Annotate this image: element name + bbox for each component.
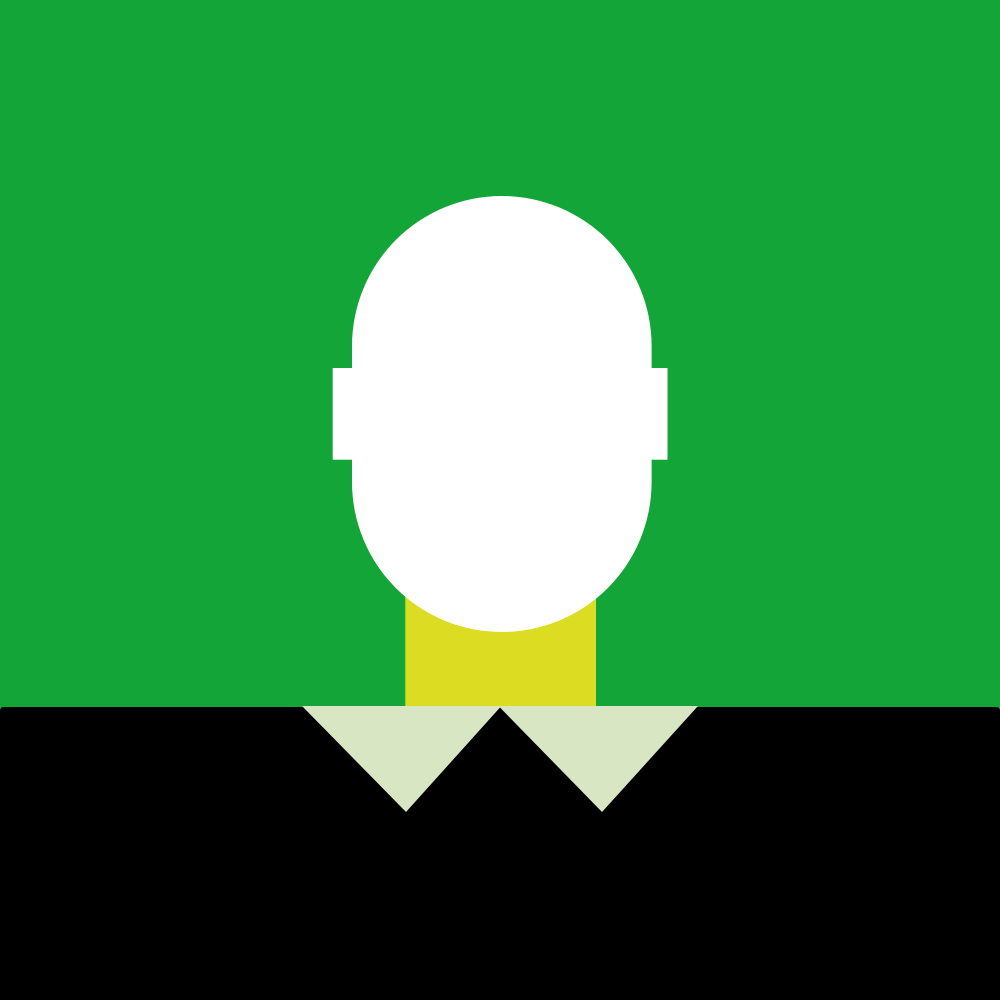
collar xyxy=(302,706,698,812)
neck xyxy=(405,560,596,710)
head shape xyxy=(352,196,652,632)
head xyxy=(333,196,668,632)
shirt body xyxy=(0,707,1000,1000)
ears xyxy=(333,368,668,460)
